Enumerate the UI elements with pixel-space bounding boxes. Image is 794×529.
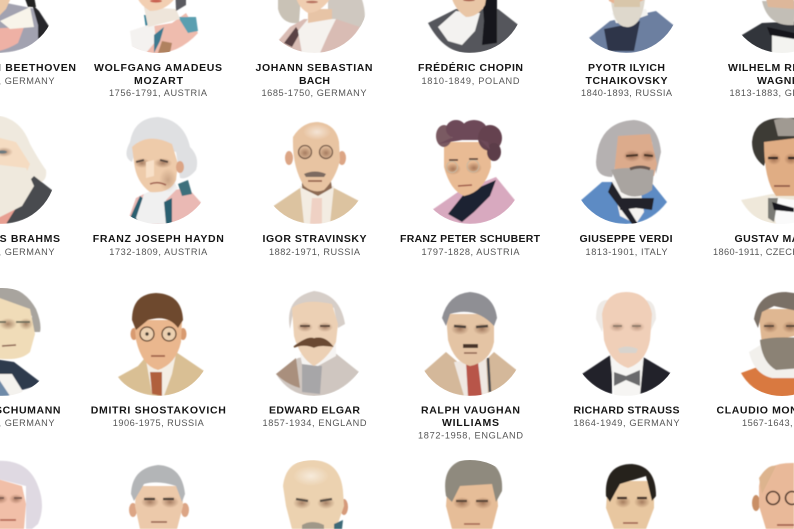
name: Bach: JOHANN SEBASTIAN: [256, 62, 372, 74]
composer card: Schumann: [0, 286, 60, 428]
composer card: Wagner: [728, 0, 794, 98]
name: Bach: BACH: [299, 75, 330, 87]
name: Schubert: FRANZ PETER SCHUBERT: [400, 233, 541, 245]
portrait: Tchaikovsky: [589, 0, 677, 53]
name: Mozart: MOZART: [134, 75, 184, 87]
name: Elgar: EDWARD ELGAR: [269, 404, 360, 416]
dates: Strauss: 1864-1949, GERMANY: [574, 418, 680, 428]
name: Strauss: RICHARD STRAUSS: [574, 404, 680, 416]
dates: Vaughan Williams: 1872-1958, ENGLAND: [418, 431, 523, 441]
name: Bach: [256, 62, 372, 87]
dates: Tchaikovsky: 1840-1893, RUSSIA: [581, 88, 673, 98]
composer card: Strauss: [574, 292, 680, 428]
dates: Chopin: 1810-1849, POLAND: [422, 76, 520, 86]
composer card: Monteverdi: [716, 292, 794, 428]
portrait: Mahler: [741, 118, 794, 232]
composer card: Haydn: [93, 117, 224, 257]
name: Vaughan Williams: WILLIAMS: [442, 417, 499, 429]
portrait: composer with dark hair, row 4: [606, 464, 656, 529]
name: Mozart: [94, 62, 222, 87]
composer card: Tchaikovsky: [581, 0, 677, 98]
name: Shostakovich: DMITRI SHOSTAKOVICH: [91, 404, 226, 416]
composer card: Beethoven: [0, 0, 76, 86]
portrait: Beethoven: [0, 0, 52, 53]
portrait: Chopin: [428, 0, 521, 53]
dates: Haydn: 1732-1809, AUSTRIA: [109, 247, 208, 257]
name: Haydn: FRANZ JOSEPH HAYDN: [93, 233, 224, 245]
composer card: Elgar: [262, 291, 367, 428]
portrait: composer with grey hair, row 4: [129, 465, 189, 529]
portrait: composer with curly grey hair, row 4: [445, 458, 502, 529]
composer card: Stravinsky: [262, 122, 366, 257]
name: Mozart: WOLFGANG AMADEUS: [94, 62, 222, 74]
portrait: bald composer with glasses, row 4: [752, 463, 794, 529]
portrait: Mozart: [130, 0, 198, 54]
dates: Shostakovich: 1906-1975, RUSSIA: [113, 418, 205, 428]
name: Tchaikovsky: TCHAIKOVSKY: [586, 75, 668, 87]
portrait: composer with lavender wig, row 4: [0, 461, 42, 529]
dates: Bach: 1685-1750, GERMANY: [262, 88, 366, 98]
name: Vaughan Williams: [421, 404, 520, 429]
dates: Schubert: 1797-1828, AUSTRIA: [422, 247, 520, 257]
composer card: Shostakovich: [91, 293, 226, 428]
name: Vaughan Williams: RALPH VAUGHAN: [421, 404, 520, 416]
name: Wagner: [728, 62, 794, 87]
portrait: Schubert: [432, 120, 518, 224]
name: Tchaikovsky: PYOTR ILYICH: [588, 62, 665, 74]
composer card: Bach: [256, 0, 372, 98]
portrait: Brahms: [0, 115, 57, 224]
name: Tchaikovsky: [586, 62, 668, 87]
portrait: Strauss: [582, 292, 672, 396]
composer card: Mahler: [713, 118, 794, 257]
portrait: Shostakovich: [118, 293, 207, 396]
name: Chopin: FRÉDÉRIC CHOPIN: [418, 61, 523, 74]
dates: Stravinsky: 1882-1971, RUSSIA: [269, 247, 361, 257]
composer card: Vaughan Williams: [418, 292, 523, 441]
composer card: Mozart: [94, 0, 222, 98]
name: Stravinsky: IGOR STRAVINSKY: [262, 233, 366, 245]
composer card: Schubert: [400, 120, 541, 257]
name: Verdi: GIUSEPPE VERDI: [580, 233, 673, 245]
portrait: Wagner: [742, 0, 794, 53]
composer card: Verdi: [579, 120, 673, 257]
portrait: bald composer with moustache, row 4: [283, 460, 348, 529]
portrait: Elgar: [276, 291, 359, 396]
composer card: Chopin: [418, 0, 523, 86]
portrait: Monteverdi: [741, 292, 794, 404]
portrait: Haydn: [126, 117, 204, 232]
portrait: Verdi: [579, 120, 667, 224]
composer card: Brahms: [0, 115, 60, 257]
dates: Elgar: 1857-1934, ENGLAND: [262, 418, 367, 428]
portrait: Schumann: [0, 286, 43, 396]
portrait: Vaughan Williams: [421, 292, 519, 396]
portrait: Stravinsky: [272, 122, 361, 224]
portrait: Bach: [278, 0, 365, 53]
dates: Verdi: 1813-1901, ITALY: [586, 247, 668, 257]
dates: Mozart: 1756-1791, AUSTRIA: [109, 88, 208, 98]
